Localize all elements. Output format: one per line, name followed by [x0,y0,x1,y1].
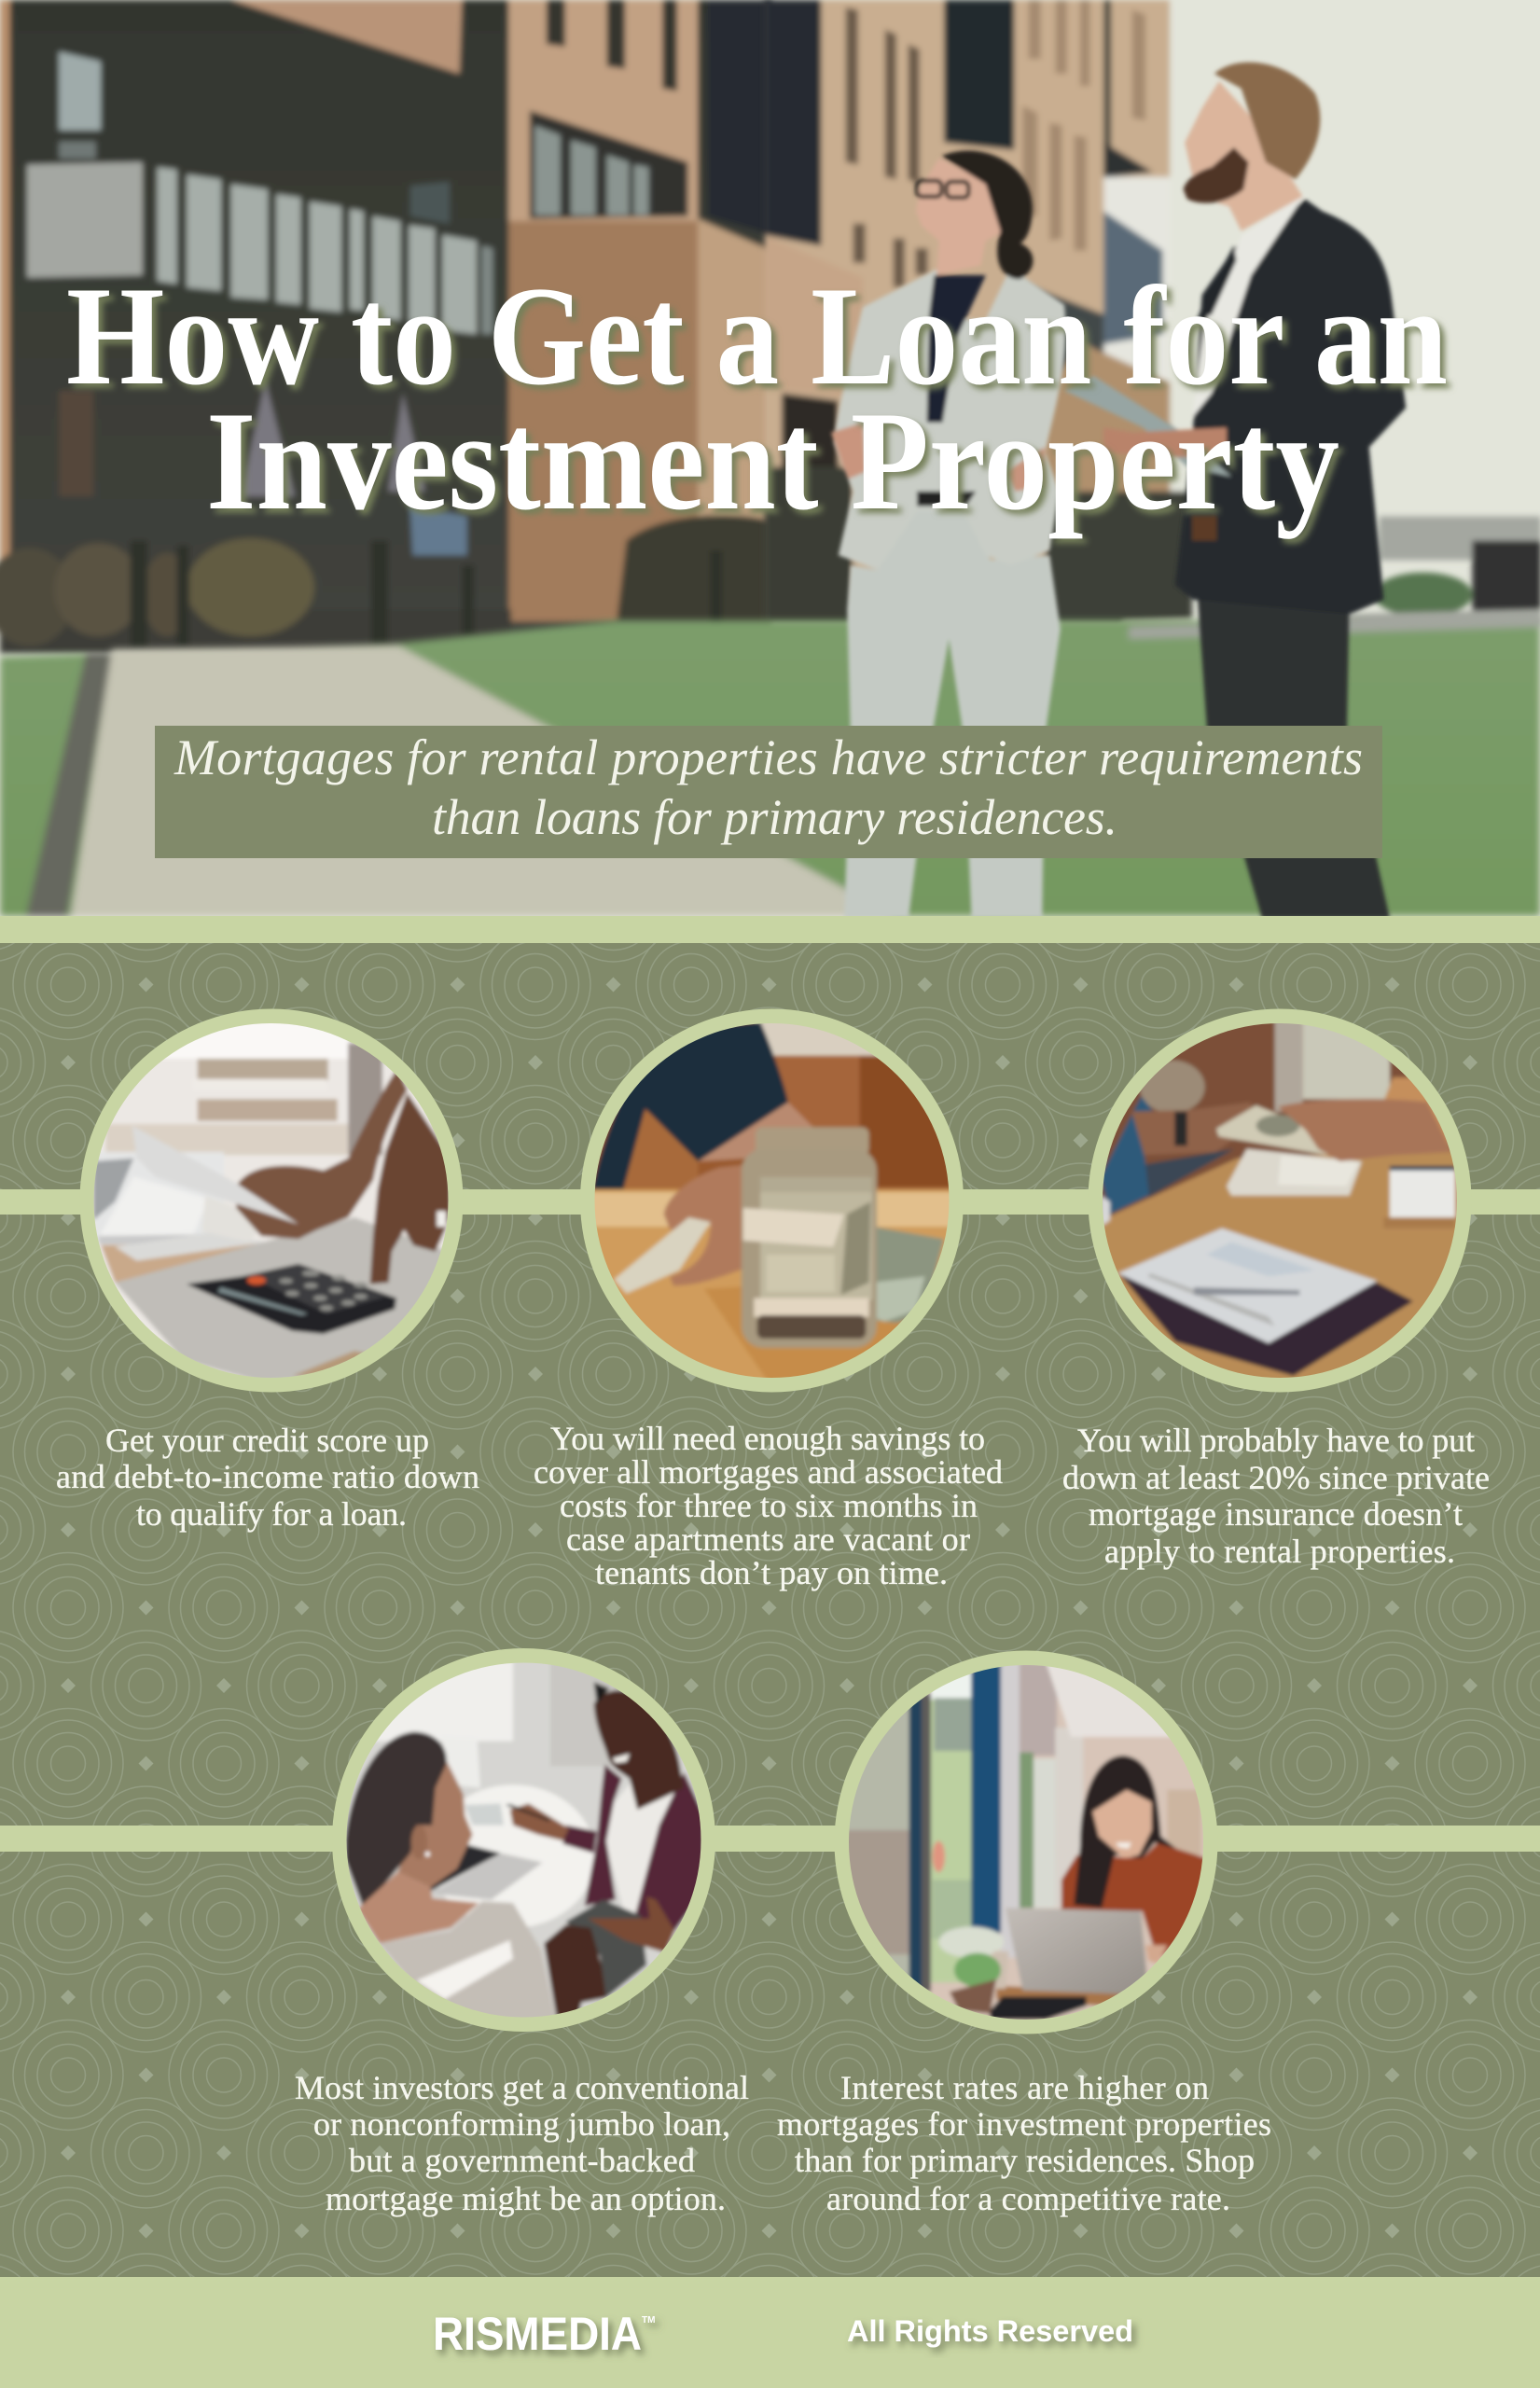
text: loan types: mortgage might be an option. [326,2180,726,2217]
text: savings [534,1420,1003,1591]
text: interest rates: mortgages for investment properties [777,2105,1271,2143]
connector: first row line [0,1189,1540,1215]
text: down payment: You will probably have to put [1077,1422,1475,1459]
photo ring [80,1009,463,1392]
photo: lawn and footpath [0,616,1540,916]
panel: subtitle banner: than loans for primary residences. [432,789,1117,845]
text: down payment [1062,1422,1490,1570]
text: loan types: but a government-backed [349,2142,695,2179]
text: loan types [295,2069,749,2217]
text: down payment: mortgage insurance doesn’t [1089,1495,1463,1533]
text: interest rates [777,2069,1271,2217]
text: savings: case apartments are vacant or [566,1520,970,1558]
photo: woman in light grey suit [831,151,1065,918]
text: interest rates: Interest rates are higher on [840,2069,1209,2106]
text: down payment: down at least 20% since private [1062,1459,1490,1496]
panel: down payment step [1062,1003,1490,1570]
text: credit score [56,1422,479,1533]
text: savings: cover all mortgages and associated [534,1453,1003,1491]
panel: patterned green background [0,943,1540,2277]
panel: loan types step [295,1642,749,2217]
text: credit score: Get your credit score up [105,1422,429,1459]
photo: apartment buildings, right part and sky [765,0,1540,636]
text: loan types: Most investors get a conventional [295,2069,749,2106]
text: rights notice: All Rights Reserved [847,2314,1133,2348]
photo ring [834,1651,1218,2034]
panel: savings step [534,1003,1003,1591]
logo: RISMedia: RISMEDIA [433,2308,642,2360]
photo: hands with calculator [93,1023,448,1378]
panel: credit score step [56,1003,479,1533]
panel: subtitle banner [155,726,1382,858]
photo: man in dark suit with clipboard [1064,62,1406,918]
text: credit score: to qualify for a loan. [136,1495,407,1533]
photo ring [332,1648,715,2032]
photo ring [1088,1009,1472,1392]
connector: second row line [0,1826,1540,1852]
panel: interest rates step [777,1644,1271,2217]
photo: money jar on table [595,1023,950,1378]
logo: RISMedia: TM [642,2315,655,2326]
panel: footer band [0,2277,1540,2388]
photo: woman smiling at laptop [849,1665,1203,2020]
text: down payment: apply to rental properties. [1104,1533,1455,1570]
text: loan types: or nonconforming jumbo loan, [313,2105,730,2143]
heading: title [66,257,1448,539]
photo: two women in consultation [347,1662,701,2017]
text: savings: tenants don’t pay on time. [595,1554,948,1591]
divider band under hero [0,916,1540,943]
panel: hero photo with two investors in front of apartment buildings [0,0,1540,918]
photo: apartment buildings, left part [0,0,771,654]
text: interest rates: than for primary residences. Shop [795,2142,1255,2179]
photo ring [580,1009,964,1392]
text: credit score: and debt-to-income ratio down [56,1458,479,1495]
text: interest rates: around for a competitive rate. [826,2180,1230,2217]
photo: cash exchange over contract [1103,1023,1457,1378]
text: savings: You will need enough savings to [550,1420,985,1457]
heading: title: Investment Property [206,382,1339,539]
panel: subtitle banner: Mortgages for rental properties have stricter requirements [173,729,1363,785]
text: savings: costs for three to six months in [560,1487,978,1524]
